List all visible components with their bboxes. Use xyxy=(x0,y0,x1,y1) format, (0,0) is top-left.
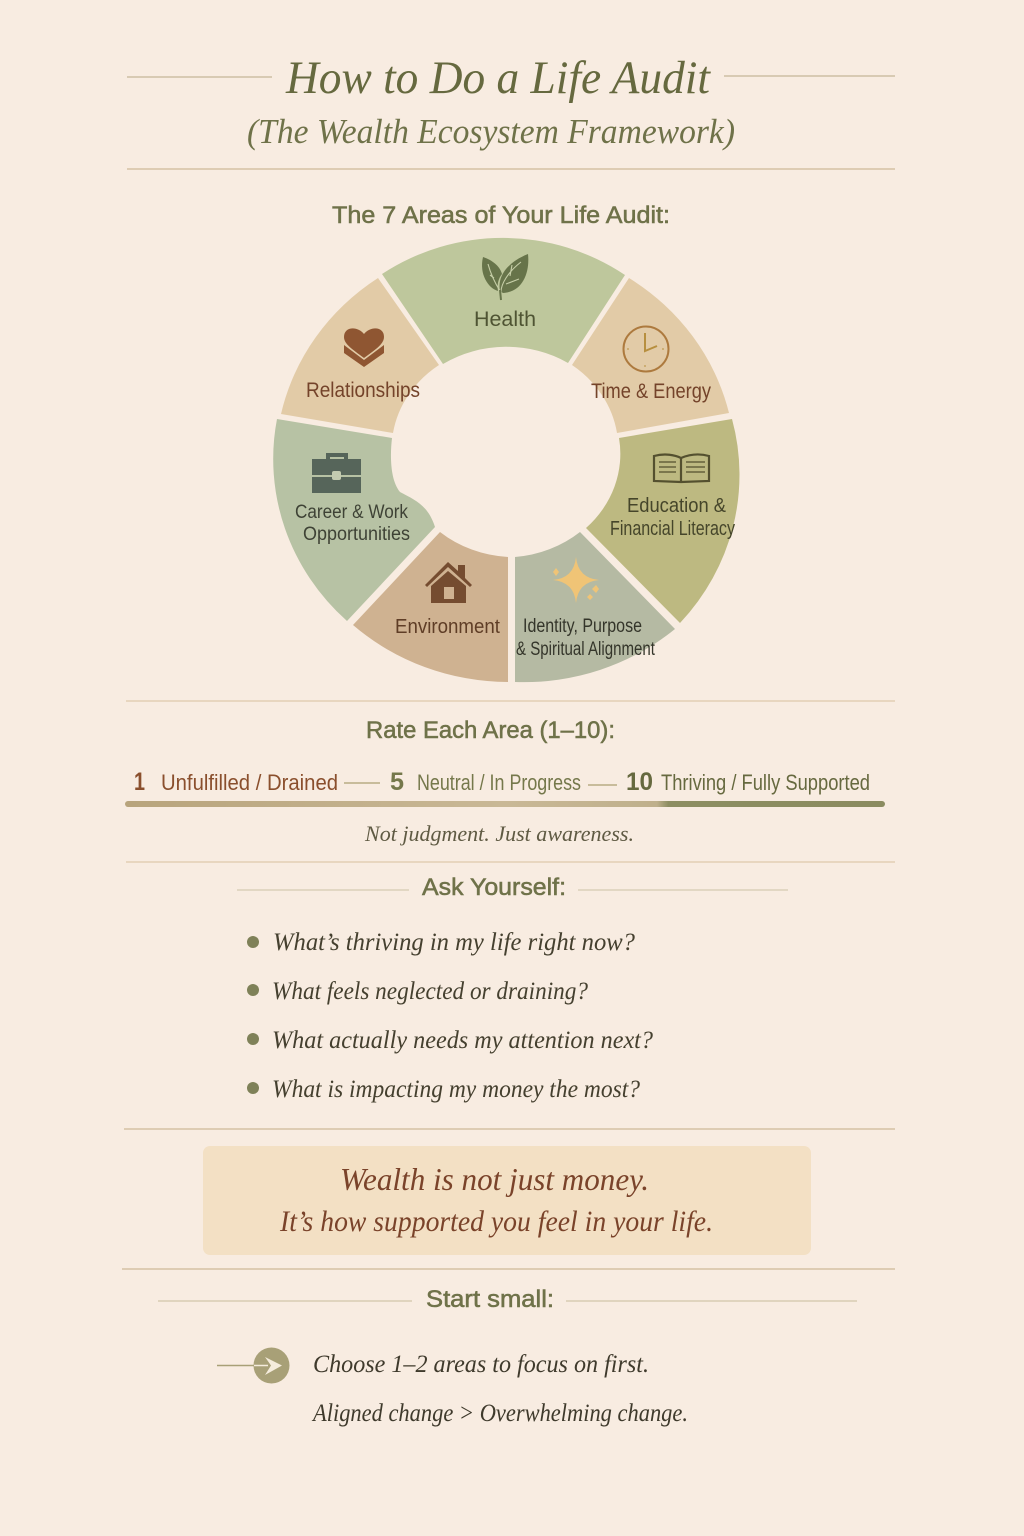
title: How to Do a Life Audit xyxy=(285,52,711,104)
label: Health: Health xyxy=(474,308,536,331)
question list: What actually needs my attention next? xyxy=(272,1027,653,1054)
label: Environment: Environment xyxy=(395,616,500,638)
label: Career & Work Opportunities: Career & Work xyxy=(295,502,408,523)
rating scale: Neutral / In Progress xyxy=(417,770,581,795)
callout: wealth quote: Wealth is not just money. xyxy=(340,1161,649,1197)
label: Identity, Purpose & Spiritual Alignment: & Spiritual Alignment xyxy=(516,639,656,660)
rating scale xyxy=(125,768,885,807)
icon: clock xyxy=(624,326,668,372)
text: start small advice: Aligned change > Overwhelming change. xyxy=(311,1400,688,1427)
label: Relationships: Relationships xyxy=(306,379,420,402)
label: Education & Financial Literacy xyxy=(610,495,735,540)
question list: What is impacting my money the most? xyxy=(272,1076,640,1103)
segment: health xyxy=(382,238,625,364)
rating scale: 5 xyxy=(390,768,404,796)
segment: relationships xyxy=(281,278,439,433)
heading: 7 areas: The 7 Areas of Your Life Audit: xyxy=(332,202,670,229)
rating scale: Unfulfilled / Drained xyxy=(161,770,338,795)
icon: heart xyxy=(344,328,384,367)
segment: time and energy xyxy=(572,278,729,433)
callout: wealth quote: It’s how supported you feel in your life. xyxy=(279,1205,713,1238)
label: Education & Financial Literacy: Education & xyxy=(627,495,727,517)
rating scale: 1 xyxy=(134,768,145,796)
heading: rate each area: Rate Each Area (1–10): xyxy=(366,717,615,744)
donut chart: 7 areas xyxy=(273,238,739,682)
segment: environment xyxy=(353,532,508,682)
icon: arrow xyxy=(217,1348,290,1384)
label: Career & Work Opportunities xyxy=(295,502,410,545)
question list: What’s thriving in my life right now? xyxy=(273,929,635,956)
segment: career xyxy=(273,419,435,621)
subtitle: (The Wealth Ecosystem Framework) xyxy=(247,112,735,151)
label: Time & Energy: Time & Energy xyxy=(591,380,711,403)
segment: identity xyxy=(515,532,675,682)
text: start small advice xyxy=(311,1351,688,1427)
label: Identity, Purpose & Spiritual Alignment: Identity, Purpose xyxy=(523,616,642,637)
icon: briefcase xyxy=(312,453,361,493)
rating scale: 10 xyxy=(626,768,653,796)
segment: education xyxy=(586,419,739,623)
icon: house xyxy=(425,562,472,603)
icon: leaves xyxy=(482,254,528,300)
icon: sparkle xyxy=(553,557,599,603)
icon: book xyxy=(654,455,709,482)
question list xyxy=(247,929,653,1103)
label: Identity, Purpose & Spiritual Alignment xyxy=(516,616,656,660)
heading: start small: Start small: xyxy=(426,1286,554,1313)
scale bar xyxy=(125,801,885,807)
callout: wealth quote xyxy=(203,1146,811,1255)
note: not judgment: Not judgment. Just awareness. xyxy=(364,821,634,846)
heading: ask yourself: Ask Yourself: xyxy=(422,874,566,901)
text: start small advice: Choose 1–2 areas to focus on first. xyxy=(313,1351,649,1378)
label: Career & Work Opportunities: Opportunities xyxy=(303,524,410,545)
rating scale: Thriving / Fully Supported xyxy=(661,770,870,795)
label: Education & Financial Literacy: Financial Literacy xyxy=(610,518,735,540)
question list: What feels neglected or draining? xyxy=(272,978,588,1005)
